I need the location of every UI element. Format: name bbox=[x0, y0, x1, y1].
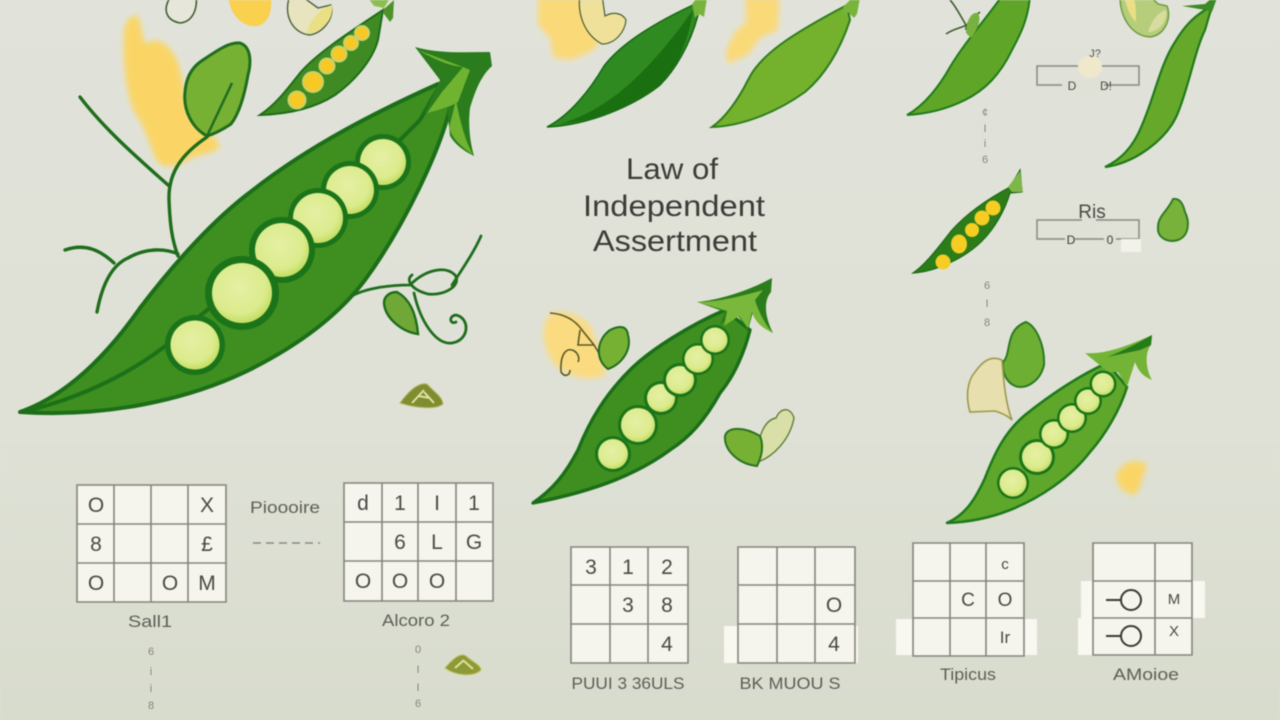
grid two: O bbox=[429, 570, 445, 593]
speckled seed lower bbox=[445, 655, 481, 675]
calyx bbox=[1085, 335, 1152, 387]
grid three: 4 bbox=[661, 633, 673, 656]
vertical marks: ¢ bbox=[982, 107, 988, 119]
vertical marks: 6 bbox=[148, 646, 154, 658]
grid three bbox=[571, 547, 688, 663]
small leaf bbox=[384, 292, 418, 334]
illustration: lower leaf and pale seed bbox=[725, 410, 794, 466]
vertical marks: 6 bbox=[415, 698, 421, 710]
body bbox=[533, 310, 750, 503]
calyx bbox=[415, 47, 492, 156]
diagram: circuit box two: 0 bbox=[1107, 233, 1114, 247]
grid two: 6 bbox=[394, 531, 406, 554]
grid five: C bbox=[961, 590, 975, 611]
grid two: d bbox=[357, 492, 369, 515]
illustration: light closed pod bbox=[712, 0, 860, 127]
small vine sprig bbox=[946, 0, 980, 34]
grid four bbox=[724, 547, 858, 663]
vertical marks: i bbox=[150, 683, 152, 695]
grid one: M bbox=[198, 572, 216, 595]
diagram: circuit box one: J? bbox=[1089, 48, 1101, 60]
vertical marks bbox=[148, 107, 990, 712]
vertical marks: I bbox=[416, 682, 420, 694]
circle symbols bbox=[1106, 590, 1141, 646]
grid two: L bbox=[431, 531, 443, 554]
diagram: circuit box one: D bbox=[1068, 79, 1077, 93]
vertical marks: I bbox=[985, 298, 989, 310]
grid three: 3 bbox=[585, 556, 597, 579]
blob and vine bbox=[544, 312, 605, 378]
illustration: middle open pod bbox=[533, 278, 773, 503]
small leaf bbox=[599, 327, 629, 369]
grid four label: BK MUOU S bbox=[740, 674, 840, 693]
grid six: X bbox=[1169, 623, 1179, 640]
vertical marks: i bbox=[150, 666, 152, 678]
grid one: X bbox=[200, 494, 214, 517]
grid five: c bbox=[1001, 556, 1009, 573]
vertical marks: i bbox=[984, 138, 986, 150]
title: Assertment bbox=[593, 225, 757, 258]
vertical marks: 0 bbox=[415, 644, 421, 656]
diagram: circuit box two bbox=[1037, 202, 1141, 252]
title bbox=[583, 153, 765, 258]
diagram: circuit box one bbox=[1037, 48, 1139, 93]
peas bbox=[595, 325, 730, 472]
calyx bbox=[697, 278, 773, 333]
grid one: O bbox=[162, 572, 178, 595]
illustration: yellow blob bbox=[1116, 461, 1147, 495]
illustration: dark closed pod bbox=[547, 0, 707, 127]
grid two bbox=[344, 483, 493, 601]
title: Independent bbox=[583, 190, 765, 223]
grid three label: PUUI 3 36ULS bbox=[572, 674, 684, 693]
diagram: circuit box one: D! bbox=[1100, 79, 1112, 93]
grid two: O bbox=[392, 570, 408, 593]
illustration: right open pod bbox=[947, 335, 1152, 523]
leaf bbox=[185, 43, 250, 136]
grid two label: Alcoro 2 bbox=[382, 611, 450, 630]
pod inner seam bbox=[30, 85, 440, 410]
vertical marks: 6 bbox=[982, 154, 988, 166]
diagram: circuit box two: Ris bbox=[1078, 202, 1106, 223]
yellow blob behind leaf bbox=[124, 16, 220, 166]
grid two: O bbox=[355, 570, 371, 593]
peas bbox=[165, 134, 411, 375]
connector label and dashes bbox=[250, 498, 320, 543]
grid three: 1 bbox=[622, 556, 634, 579]
grid three: 2 bbox=[661, 556, 673, 579]
grid six bbox=[1078, 543, 1205, 655]
grid six: M bbox=[1168, 591, 1180, 608]
diagram: circuit box two: D bbox=[1067, 233, 1076, 247]
vine stems bbox=[65, 97, 207, 312]
right vine with tendril loop bbox=[350, 236, 481, 343]
grid one: £ bbox=[201, 533, 213, 556]
illustration: pear-shaped seed bbox=[1158, 199, 1188, 241]
pod body bbox=[20, 84, 450, 413]
grid five bbox=[896, 543, 1037, 656]
illustration: large pea pod with vines bbox=[20, 16, 492, 413]
grid one label: Sall1 bbox=[128, 612, 172, 631]
vertical marks: I bbox=[983, 123, 987, 135]
grid six label: AMoioe bbox=[1113, 665, 1179, 684]
illustration: right side leaf and dried seed bbox=[968, 322, 1044, 420]
grid five label: Tipicus bbox=[940, 665, 996, 684]
grid three: 3 bbox=[622, 594, 634, 617]
illustration: right top closed pod bbox=[907, 0, 1030, 115]
grid two: G bbox=[466, 531, 482, 554]
illustration: top middle yellow blobs bbox=[538, 0, 780, 64]
vertical marks: 8 bbox=[984, 317, 990, 329]
illustration: speckled seed bbox=[400, 384, 443, 408]
illustration: top seeds and yellow blob bbox=[166, 0, 332, 35]
grid three: 8 bbox=[661, 594, 673, 617]
grid two: I bbox=[434, 492, 440, 515]
illustration: right tall closed pod bbox=[1105, 0, 1217, 167]
vertical marks: I bbox=[416, 664, 420, 676]
illustration: yellow-pea small pod bbox=[913, 170, 1023, 273]
connector label and dashes: Pioooire bbox=[250, 498, 320, 517]
grid one: O bbox=[88, 572, 104, 595]
vertical marks: 6 bbox=[984, 280, 990, 292]
grid five: Ir bbox=[1000, 628, 1011, 647]
peas bbox=[997, 370, 1116, 499]
grid five: O bbox=[998, 590, 1012, 611]
grid four: 4 bbox=[828, 633, 840, 656]
grid one bbox=[77, 485, 226, 602]
illustration: small pod with yellow peas bbox=[260, 0, 394, 115]
grid one: 8 bbox=[90, 533, 102, 556]
grid two: 1 bbox=[394, 492, 406, 515]
grid one: O bbox=[88, 494, 104, 517]
vertical marks: 8 bbox=[148, 700, 154, 712]
grid four: O bbox=[826, 594, 842, 617]
grid two: 1 bbox=[468, 492, 480, 515]
illustration: top right seed bbox=[1120, 0, 1169, 37]
title: Law of bbox=[626, 153, 719, 186]
